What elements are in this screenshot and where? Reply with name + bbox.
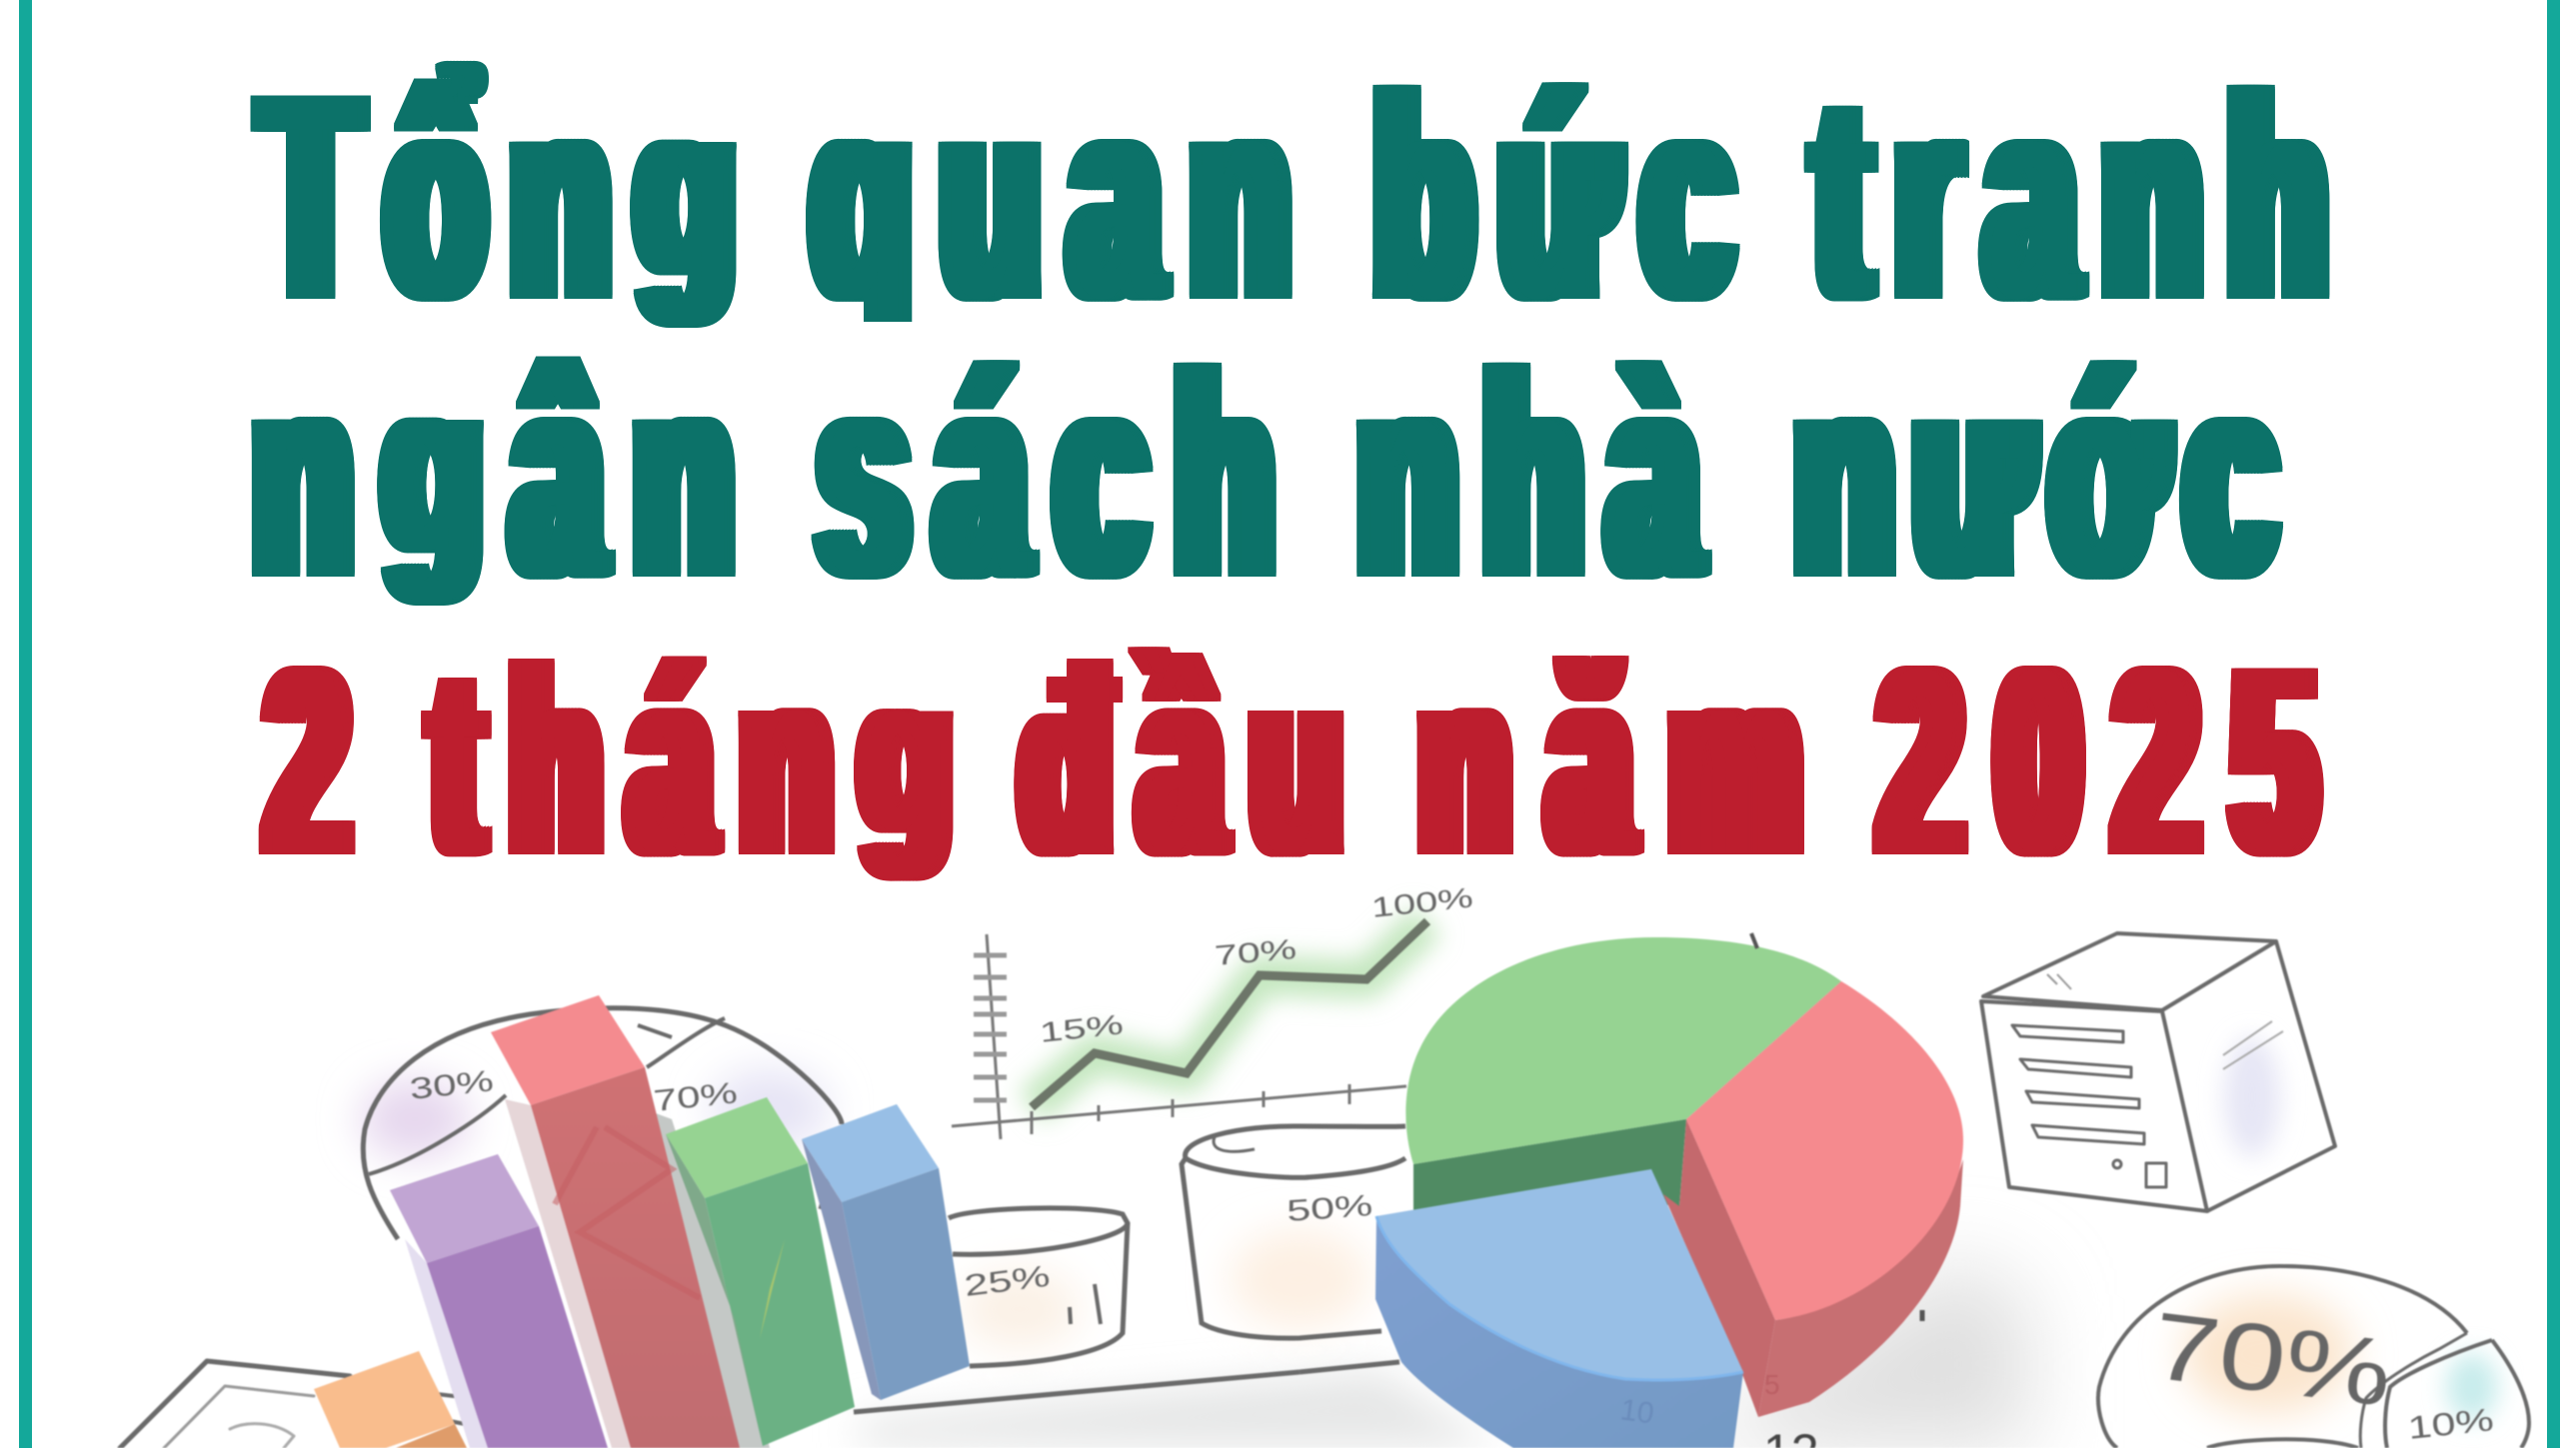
faint number on red side: 5 xyxy=(1764,1369,1780,1400)
floor shadow xyxy=(860,1259,2029,1448)
sketch: server tower xyxy=(1981,933,2335,1211)
sketch: pie circle with 30% and 70% xyxy=(360,1008,842,1249)
sketch: paper sheet xyxy=(120,1361,465,1448)
green slice xyxy=(1405,937,1841,1164)
sketch: 70% and 10% circle xyxy=(2098,1266,2529,1448)
label 25%: 25% xyxy=(963,1260,1052,1303)
title line 2: n ân sách nhà nước xyxy=(254,313,2296,637)
dark green side xyxy=(1413,1119,1686,1214)
green bar xyxy=(666,1097,855,1446)
sketch: ground line xyxy=(854,1372,1299,1412)
blue slice xyxy=(1376,1169,1743,1380)
title line 2: g xyxy=(384,329,514,605)
line chart xyxy=(952,881,1474,1139)
label 70%: 70% xyxy=(1214,933,1297,971)
label 70%: 70% xyxy=(2146,1293,2398,1427)
purple bar xyxy=(390,1154,608,1448)
sketch: 25% cylinder xyxy=(949,1208,1128,1366)
left teal border xyxy=(19,0,32,1448)
label 50%: 50% xyxy=(1286,1189,1373,1228)
label 30%: 30% xyxy=(408,1064,495,1106)
label 10%: 10% xyxy=(2406,1401,2495,1446)
sketch: 50% cylinder xyxy=(1182,1126,1405,1372)
faint number on blue side: 10 xyxy=(1618,1393,1656,1431)
bar shadows xyxy=(505,1099,631,1448)
title line 1: q xyxy=(813,35,942,359)
blue slice side xyxy=(1375,1216,1743,1448)
right teal border xyxy=(2547,0,2560,1448)
red bar xyxy=(491,995,740,1448)
title line 1: Tổn uan bức tranh xyxy=(262,35,2354,359)
3D pie chart xyxy=(1375,933,1963,1448)
title line 3: period: 2 thán đầu năm 2025 xyxy=(267,614,2351,909)
label 70%: 70% xyxy=(652,1076,739,1118)
blue bar xyxy=(802,1104,970,1400)
red inner face xyxy=(1663,1119,1775,1417)
label 15%: 15% xyxy=(1038,1008,1125,1048)
bar chart: 3D bars xyxy=(314,995,970,1448)
orange bar xyxy=(314,1351,467,1448)
title line 3: period: g xyxy=(861,629,980,880)
title line 1: g xyxy=(637,51,762,327)
label 100%: 100% xyxy=(1369,881,1474,923)
red slice side xyxy=(1758,1159,1963,1417)
red slice xyxy=(1686,981,1963,1320)
